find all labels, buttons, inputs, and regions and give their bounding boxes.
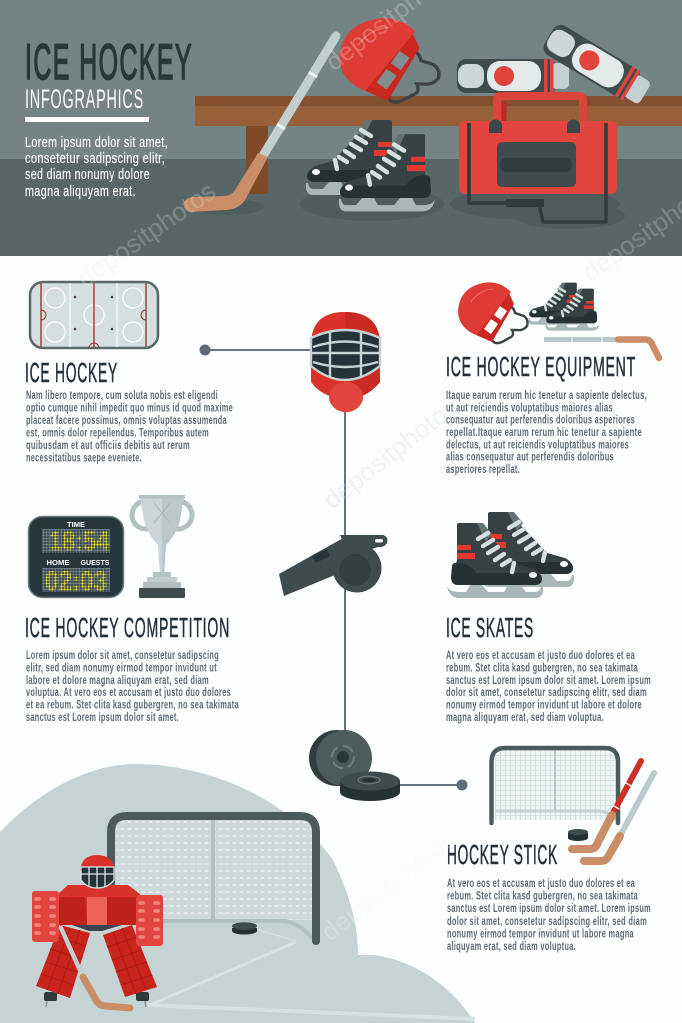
goalie [32, 855, 163, 1008]
panel: header banner: ICE HOCKEY [25, 34, 193, 90]
header subtitle: INFOGRAPHICS [25, 84, 144, 114]
text block: labore et dolore magna aliquyam erat, sed diam [26, 673, 209, 687]
hockey stick [184, 36, 336, 212]
text block: Lorem ipsum dolor sit amet, consetetur sadipscing [26, 648, 219, 662]
icon: skates [447, 512, 574, 598]
goalie stick [61, 928, 130, 1008]
icon: scoreboard: 02:03 [45, 566, 107, 596]
text block: est, omnis dolor repellendus. Temporibus autem [26, 426, 209, 440]
icon: scoreboard: TIME [67, 520, 85, 529]
text block: et ea rebum. Stet clita kasd gubergren, no sea takimata [26, 698, 239, 712]
icon: small puck [568, 829, 588, 841]
goalie body [72, 925, 122, 931]
icon: helmet [458, 282, 528, 343]
icon: skates [529, 283, 599, 331]
panel: header banner [0, 0, 682, 256]
text block: voluptua. At vero eos et accusam et justo duo dolores [26, 685, 231, 699]
icon: trophy [132, 495, 192, 598]
icon: goal [492, 748, 618, 823]
text block [26, 648, 239, 724]
goalie skates [44, 992, 149, 1007]
helmet [339, 18, 439, 102]
bench [195, 96, 682, 194]
text block: quibusdam et aut officiis debitis aut rerum [26, 438, 190, 452]
heading: ICE SKATES [446, 612, 534, 643]
panel: ice skates [446, 512, 651, 724]
icon: scoreboard: GUESTS [80, 558, 110, 567]
panel: hockey stick [447, 748, 654, 953]
heading: ICE HOCKEY COMPETITION [25, 612, 230, 643]
icon: whistle [279, 535, 388, 596]
sports bag [459, 96, 617, 222]
icon: rink [30, 282, 158, 348]
header text [25, 134, 168, 200]
text block: optio cumque nihil impedit quo minus id quod maxime [26, 400, 233, 414]
puck [232, 922, 257, 934]
shin pads [457, 22, 654, 108]
header wall and floor [0, 0, 682, 256]
panel: ice hockey [25, 282, 233, 464]
icon: scoreboard: HOME [46, 558, 70, 567]
ice background [0, 764, 475, 1023]
text block [446, 648, 651, 724]
text block: placeat facere possimus, omnis voluptas assumenda [26, 413, 227, 427]
large goal [111, 816, 316, 941]
icon: goalie mask [311, 312, 380, 412]
watermarks: depositphotos [317, 391, 463, 515]
skates [306, 120, 435, 211]
floor shadows [192, 187, 625, 229]
text block [447, 876, 651, 953]
icon: pucks [309, 730, 400, 801]
panel: ice hockey competition [25, 495, 239, 724]
text block [446, 388, 647, 476]
text block: aliquyam erat, sed diam voluptua. [447, 939, 576, 953]
text block [26, 388, 233, 464]
text block: necessitatibus saepe eveniete. [26, 450, 142, 464]
header text: consetetur sadipscing elitr, [25, 150, 165, 167]
goalie blockers [32, 891, 163, 946]
goalie helmet [80, 855, 115, 888]
panel: hockey stick: HOCKEY STICK [447, 839, 558, 870]
watermarks: depositphotos [71, 175, 221, 293]
connector lines [205, 350, 462, 785]
text block: sanctus est Lorem ipsum dolor sit amet. [26, 710, 179, 724]
header underline [25, 117, 149, 122]
header text: Lorem ipsum dolor sit amet, [25, 134, 168, 151]
text block: asperiores repellat. [446, 462, 520, 476]
panel: ice hockey equipment [446, 282, 659, 476]
icon: stick [544, 337, 659, 358]
icon: scoreboard: 18:54 [49, 526, 109, 556]
connector dots [200, 344, 468, 790]
text block: elitr, sed diam nonumy eirmod tempor invidunt ut [26, 660, 217, 674]
watermarks: depositphotos [315, 823, 461, 947]
ice markings [148, 926, 475, 1019]
panel: ice scene [0, 764, 475, 1023]
header text: sed diam nonumy dolore [25, 166, 150, 183]
icon: scoreboard [28, 516, 124, 598]
icon: crossed sticks [572, 761, 654, 861]
heading: ICE HOCKEY [25, 357, 118, 388]
text block: Nam libero tempore, cum soluta nobis est eligendi [26, 388, 218, 402]
goalie leg pads [36, 925, 157, 998]
header text: magna aliquyam erat. [25, 183, 136, 200]
